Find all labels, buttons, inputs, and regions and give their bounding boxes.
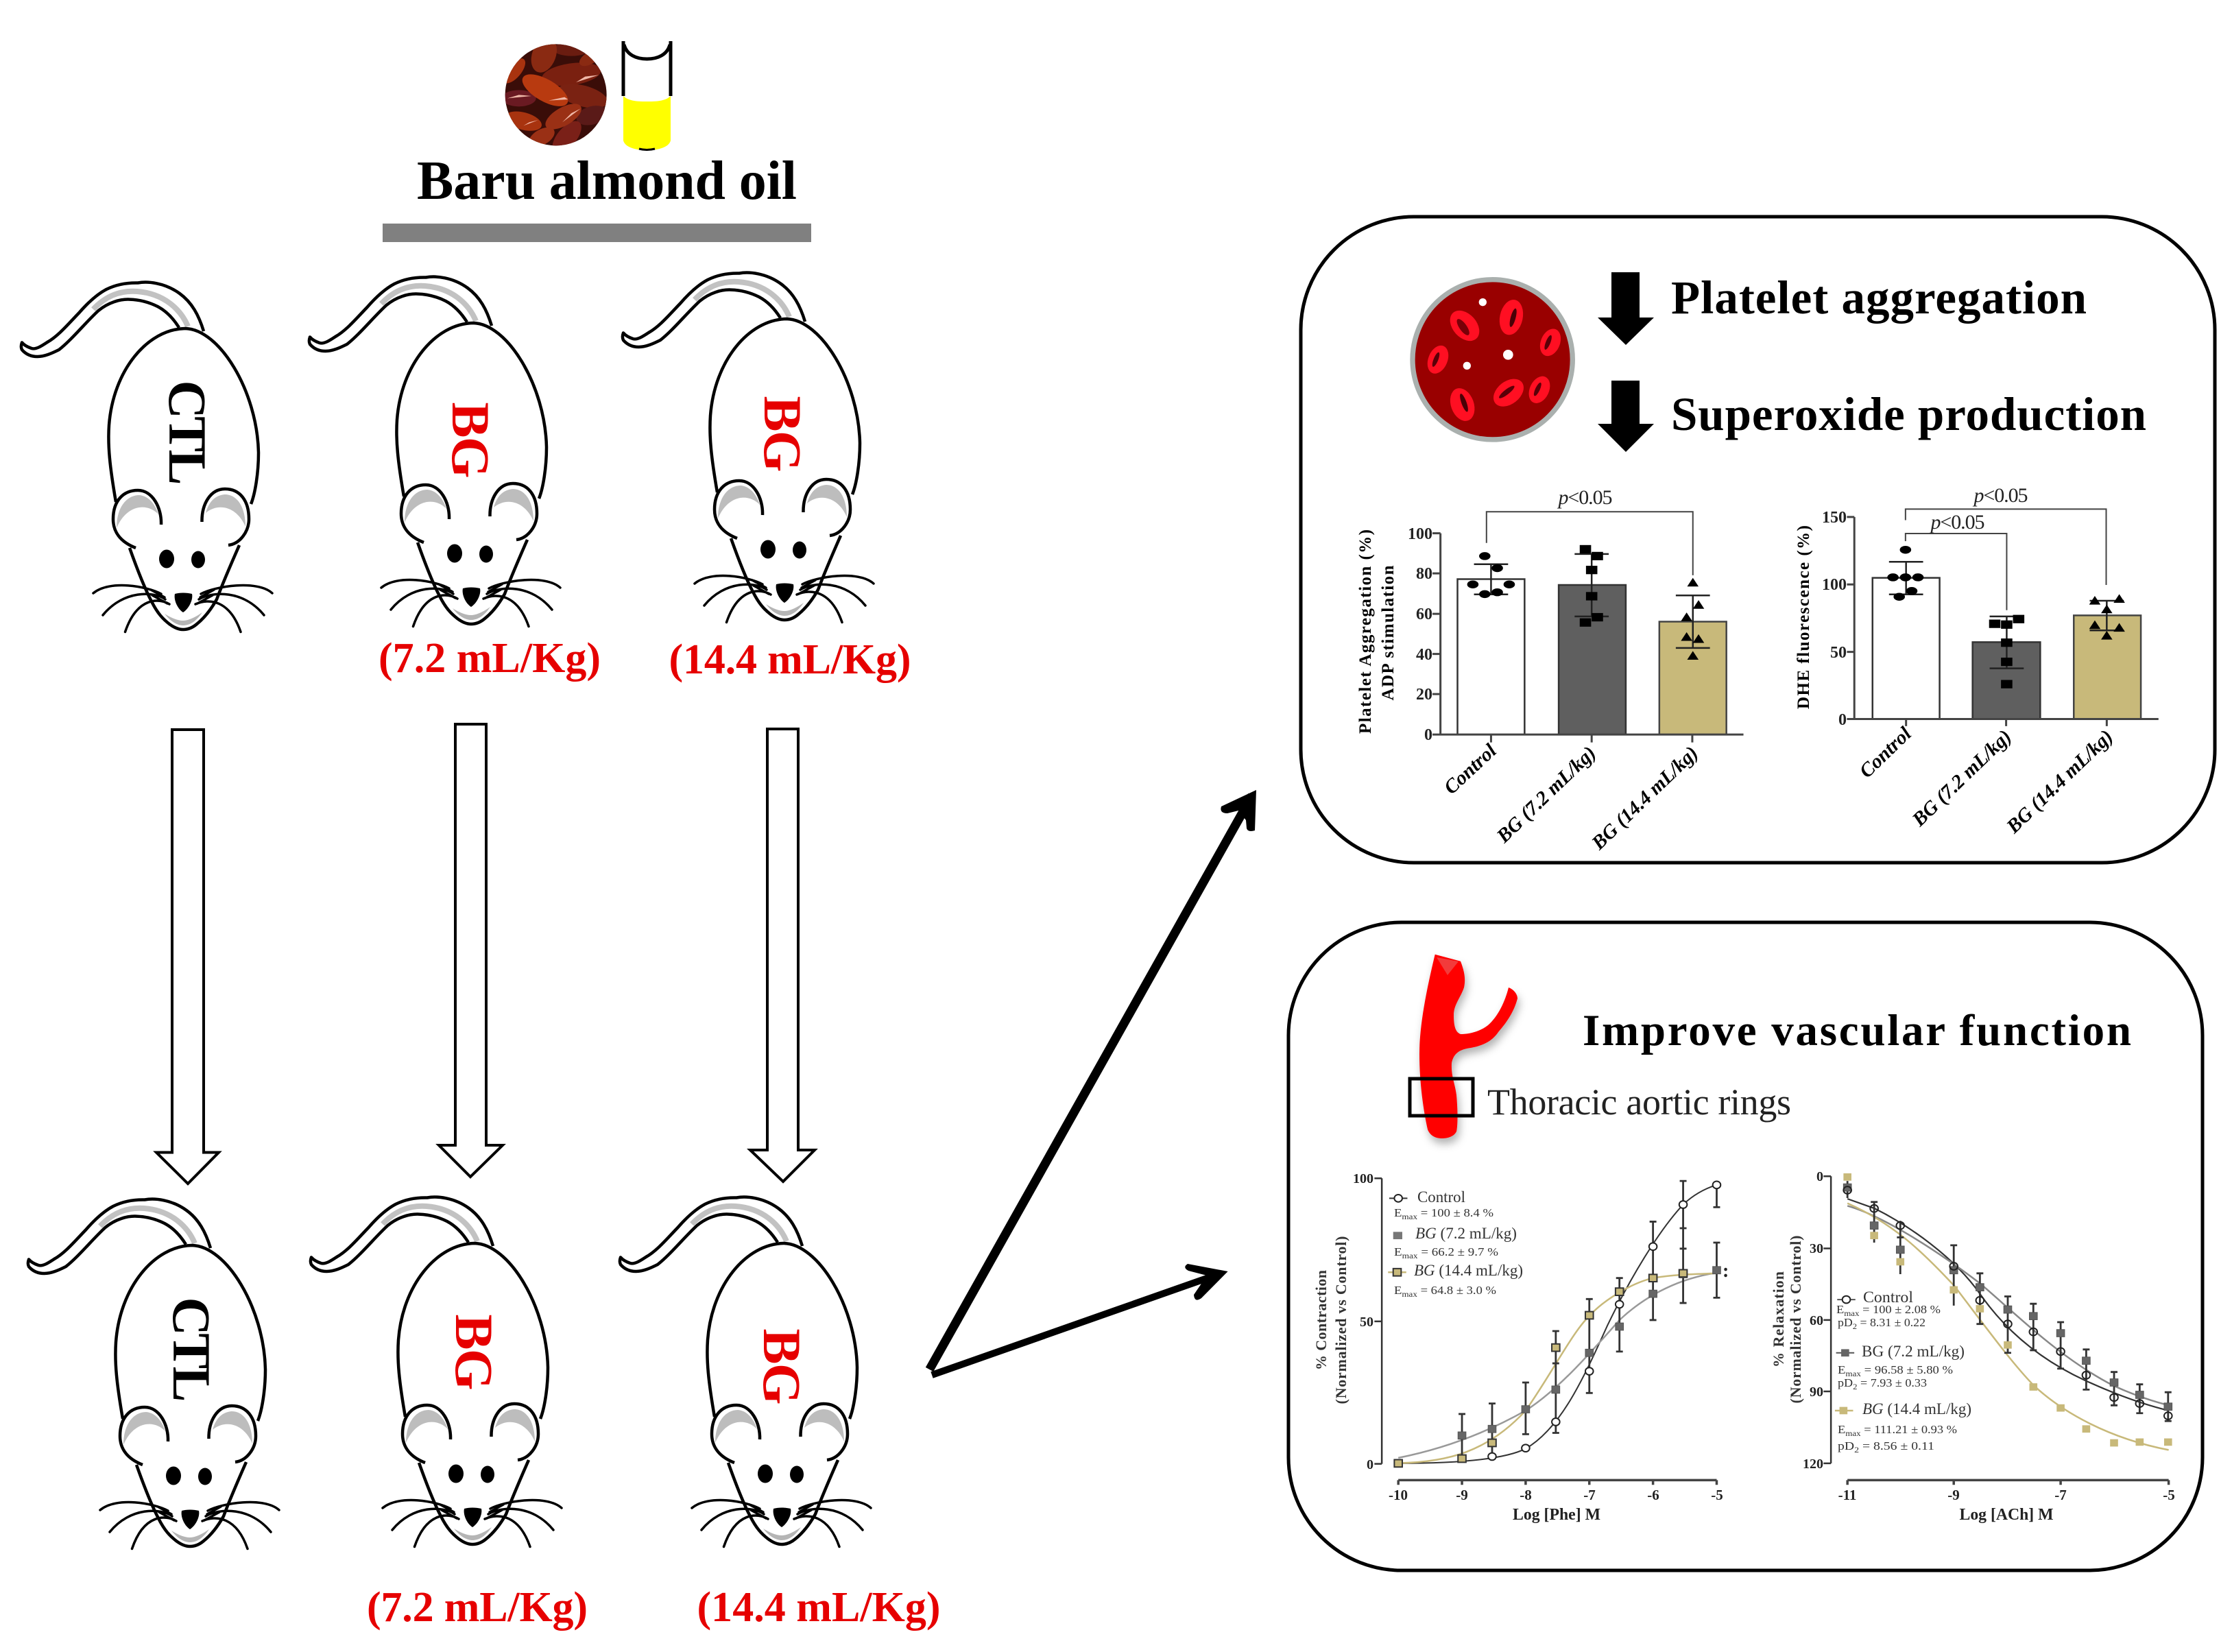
mouse: BG top 14.4: BG — [753, 396, 813, 472]
legend relaxation: max — [1845, 1369, 1861, 1378]
legend relaxation: BG (14.4 mL/kg) — [1862, 1400, 1971, 1417]
axis title y contraction: % Contraction — [1312, 1270, 1330, 1370]
legend contraction: = 66.2 ± 9.7 % — [1418, 1245, 1498, 1258]
plot: DHE bars — [1847, 509, 2159, 726]
plot: relaxation curves — [1823, 1173, 2172, 1485]
mouse: BG bottom 14.4: BG — [752, 1329, 812, 1404]
y axis labels platelet: 60 — [1416, 606, 1432, 623]
x axis labels contraction: -7 — [1583, 1487, 1596, 1503]
y axis labels platelet: 0 — [1424, 726, 1432, 744]
x axis labels contraction — [1389, 1487, 1723, 1503]
significance mark: : — [1723, 1260, 1729, 1282]
x axis labels contraction: -8 — [1520, 1487, 1532, 1503]
y axis labels platelet: 40 — [1416, 646, 1432, 664]
x axis labels platelet: BG (14.4 mL/kg) — [1587, 742, 1703, 854]
dose label top 14.4: (14.4 mL/Kg) — [669, 636, 911, 683]
axis title y contraction: (Normalized vs Control) — [1332, 1236, 1349, 1404]
x axis labels platelet: BG (7.2 mL/kg) — [1492, 742, 1600, 848]
x axis labels relaxation: -5 — [2163, 1487, 2175, 1503]
legend relaxation: pD — [1838, 1316, 1852, 1329]
y axis labels platelet: 100 — [1408, 525, 1432, 543]
legend contraction: max — [1402, 1251, 1418, 1260]
panel: platelet aggregation — [1301, 217, 2215, 863]
mouse: CTL top: CTL — [158, 380, 217, 486]
legend contraction: Control — [1417, 1188, 1465, 1206]
y axis labels platelet — [1356, 525, 1432, 744]
axis title y relaxation: (Normalized vs Control) — [1787, 1236, 1804, 1403]
mouse: CTL bottom: CTL — [162, 1297, 221, 1402]
legend relaxation: E — [1838, 1363, 1845, 1376]
legend contraction: = 100 ± 8.4 % — [1417, 1206, 1493, 1219]
legend relaxation: pD — [1838, 1439, 1852, 1452]
axis title x contraction: Log [Phe] M — [1513, 1506, 1600, 1524]
bar chart: DHE fluorescence — [1795, 484, 2159, 838]
y axis labels relaxation: 0 — [1816, 1169, 1823, 1184]
y axis labels DHE: 100 — [1822, 576, 1847, 594]
legend contraction: = 64.8 ± 3.0 % — [1417, 1284, 1496, 1297]
x axis labels DHE: Control — [1856, 722, 1917, 782]
y axis labels contraction: 0 — [1367, 1457, 1373, 1472]
y axis labels platelet: 20 — [1416, 686, 1432, 704]
legend contraction: E — [1394, 1284, 1401, 1297]
p value DHE inner: p<0.05 — [1930, 511, 1984, 534]
title: Baru almond oil — [417, 151, 797, 211]
x axis labels DHE: BG (7.2 mL/kg) — [1908, 726, 2016, 831]
legend relaxation: = 8.56 ± 0.11 — [1859, 1439, 1934, 1452]
x axis labels contraction: -6 — [1647, 1487, 1659, 1503]
heading: platelet aggregation: Platelet aggregation — [1671, 272, 2087, 324]
mouse: CTL bottom — [28, 1199, 279, 1548]
arrow: BG 14.4 down — [750, 729, 815, 1182]
icon: oil tube — [623, 41, 671, 150]
x axis labels contraction: -5 — [1711, 1487, 1723, 1503]
bar chart: platelet aggregation — [1356, 486, 1744, 854]
plot: contraction curves — [1374, 1178, 1720, 1485]
x axis labels platelet: Control — [1440, 739, 1501, 799]
legend relaxation: 2 — [1853, 1321, 1857, 1331]
y axis labels DHE: 0 — [1838, 711, 1847, 729]
legend relaxation: max — [1845, 1428, 1861, 1438]
y axis labels DHE: 50 — [1830, 644, 1847, 662]
legend contraction: E — [1394, 1206, 1401, 1219]
mouse: BG top 7.2: BG — [441, 402, 501, 479]
x axis labels DHE — [1856, 722, 2117, 838]
legend relaxation: E — [1836, 1303, 1843, 1316]
y axis labels relaxation: 30 — [1810, 1241, 1823, 1256]
axis title y relaxation: % Relaxation — [1770, 1271, 1787, 1367]
axis title y contraction — [1312, 1236, 1349, 1404]
legend relaxation: pD — [1838, 1376, 1852, 1389]
legend contraction — [1394, 1188, 1523, 1299]
y axis labels relaxation — [1803, 1169, 1823, 1472]
x axis labels relaxation: -11 — [1838, 1487, 1856, 1503]
mouse: BG top 7.2 — [309, 277, 560, 627]
x axis labels relaxation: -7 — [2054, 1487, 2067, 1503]
y axis labels contraction: 100 — [1353, 1171, 1373, 1186]
icon: down arrow platelet — [1598, 272, 1654, 345]
legend relaxation: Control — [1863, 1289, 1913, 1306]
x axis labels platelet — [1440, 739, 1703, 854]
legend relaxation: BG (7.2 mL/kg) — [1862, 1343, 1965, 1360]
x axis labels contraction: -10 — [1389, 1487, 1408, 1503]
panel: vascular function — [1288, 922, 2203, 1570]
icon: baru almonds — [505, 44, 607, 145]
y axis labels contraction — [1353, 1171, 1373, 1472]
mouse: CTL top — [21, 283, 272, 632]
mouse: BG bottom 14.4 — [620, 1197, 871, 1547]
mouse: BG top 14.4 — [623, 273, 874, 623]
icon: aorta — [1419, 955, 1517, 1138]
line chart: relaxation — [1770, 1169, 2175, 1524]
heading: superoxide production: Superoxide production — [1671, 388, 2146, 440]
y axis labels platelet: Platelet Aggregation (%) — [1356, 529, 1375, 734]
x axis labels DHE: BG (14.4 mL/kg) — [2002, 726, 2117, 838]
arrow: to platelet panel — [930, 790, 1256, 1369]
y axis labels relaxation: 60 — [1810, 1313, 1823, 1328]
legend contraction: max — [1402, 1289, 1417, 1299]
arrow: to vascular panel — [932, 1264, 1228, 1375]
legend relaxation — [1836, 1289, 1971, 1455]
y axis labels contraction: 50 — [1360, 1315, 1373, 1330]
y axis labels platelet: 80 — [1416, 565, 1432, 583]
line chart: contraction — [1312, 1171, 1729, 1524]
y axis labels DHE: 150 — [1822, 509, 1847, 527]
y axis labels platelet: ADP stimulation — [1379, 565, 1397, 701]
legend relaxation: E — [1838, 1423, 1845, 1436]
axis title x relaxation: Log [ACh] M — [1960, 1506, 2053, 1524]
dose label bottom 7.2: (7.2 mL/Kg) — [367, 1584, 588, 1631]
dose label bottom 14.4: (14.4 mL/Kg) — [697, 1584, 941, 1631]
arrow: CTL down — [156, 730, 219, 1184]
label: thoracic aortic rings: Thoracic aortic rings — [1487, 1081, 1791, 1123]
icon: blood cells — [1413, 280, 1572, 440]
legend relaxation: = 96.58 ± 5.80 % — [1861, 1363, 1953, 1376]
y axis labels DHE: DHE fluorescence (%) — [1795, 525, 1813, 709]
mouse: BG bottom 7.2: BG — [444, 1314, 504, 1391]
legend relaxation: 2 — [1854, 1445, 1859, 1455]
dose label top 7.2: (7.2 mL/Kg) — [379, 635, 601, 682]
legend contraction: E — [1394, 1245, 1401, 1258]
legend relaxation: = 7.93 ± 0.33 — [1857, 1376, 1927, 1389]
x axis labels contraction: -9 — [1456, 1487, 1468, 1503]
y axis labels DHE — [1795, 509, 1847, 729]
legend contraction: max — [1402, 1212, 1417, 1221]
y axis labels relaxation: 90 — [1810, 1385, 1823, 1400]
legend contraction: BG (7.2 mL/kg) — [1415, 1225, 1517, 1242]
legend relaxation: = 100 ± 2.08 % — [1860, 1303, 1941, 1316]
treatment bar — [383, 224, 811, 242]
legend contraction: BG (14.4 mL/kg) — [1414, 1262, 1523, 1279]
x axis labels relaxation — [1838, 1487, 2175, 1503]
legend relaxation: = 111.21 ± 0.93 % — [1861, 1423, 1957, 1436]
icon: down arrow superoxide — [1598, 381, 1654, 452]
legend relaxation: max — [1844, 1308, 1860, 1318]
legend relaxation: 2 — [1853, 1382, 1857, 1391]
rings box — [1410, 1079, 1473, 1116]
plot: platelet bars — [1432, 512, 1744, 743]
mouse: BG bottom 7.2 — [311, 1197, 562, 1547]
x axis labels relaxation: -9 — [1947, 1487, 1960, 1503]
y axis labels relaxation: 120 — [1803, 1457, 1823, 1472]
axis title y relaxation — [1770, 1236, 1804, 1403]
legend relaxation: = 8.31 ± 0.22 — [1857, 1316, 1925, 1329]
p value platelet: p<0.05 — [1557, 486, 1613, 509]
arrow: BG 7.2 down — [439, 724, 503, 1177]
p value DHE outer: p<0.05 — [1972, 484, 2028, 507]
heading: improve vascular function: Improve vascular function — [1583, 1006, 2131, 1055]
